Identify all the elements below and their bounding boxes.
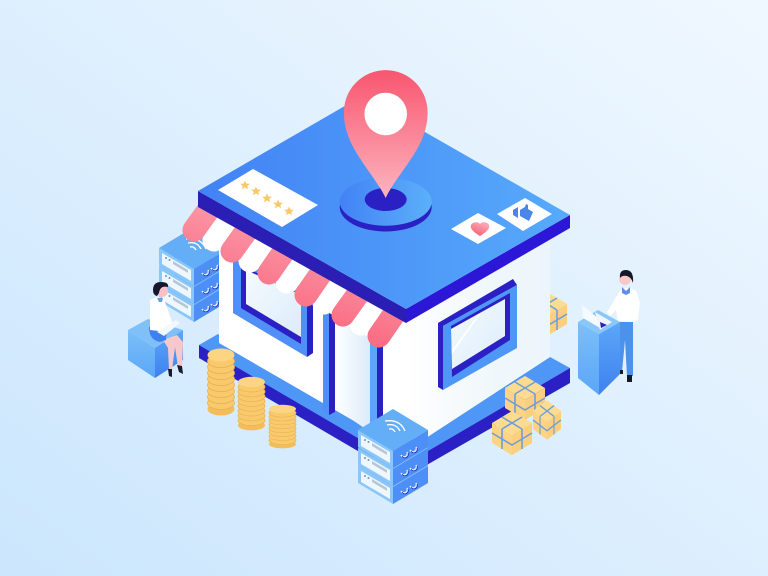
rating card with five stars <box>218 169 318 227</box>
location pin with base disc <box>340 70 432 231</box>
shop window: right <box>438 279 517 390</box>
heart card <box>451 213 506 244</box>
coin stack 3 <box>269 405 296 448</box>
parcel behind the store <box>527 292 567 336</box>
seated woman with laptop on a cube <box>128 282 183 378</box>
server stack: left <box>159 227 229 322</box>
coin stack 2 <box>238 377 265 430</box>
pile of parcels <box>492 376 561 455</box>
standing man at a laptop desk <box>578 270 640 395</box>
store walls <box>219 205 550 451</box>
striped awning <box>194 205 397 336</box>
thumbs-up card <box>497 198 552 231</box>
server stack: front <box>358 409 428 504</box>
shop window: left <box>233 250 313 357</box>
shop door <box>323 310 383 432</box>
coin stack 1 <box>208 348 234 416</box>
store base platform <box>199 334 570 478</box>
roof <box>198 96 570 323</box>
